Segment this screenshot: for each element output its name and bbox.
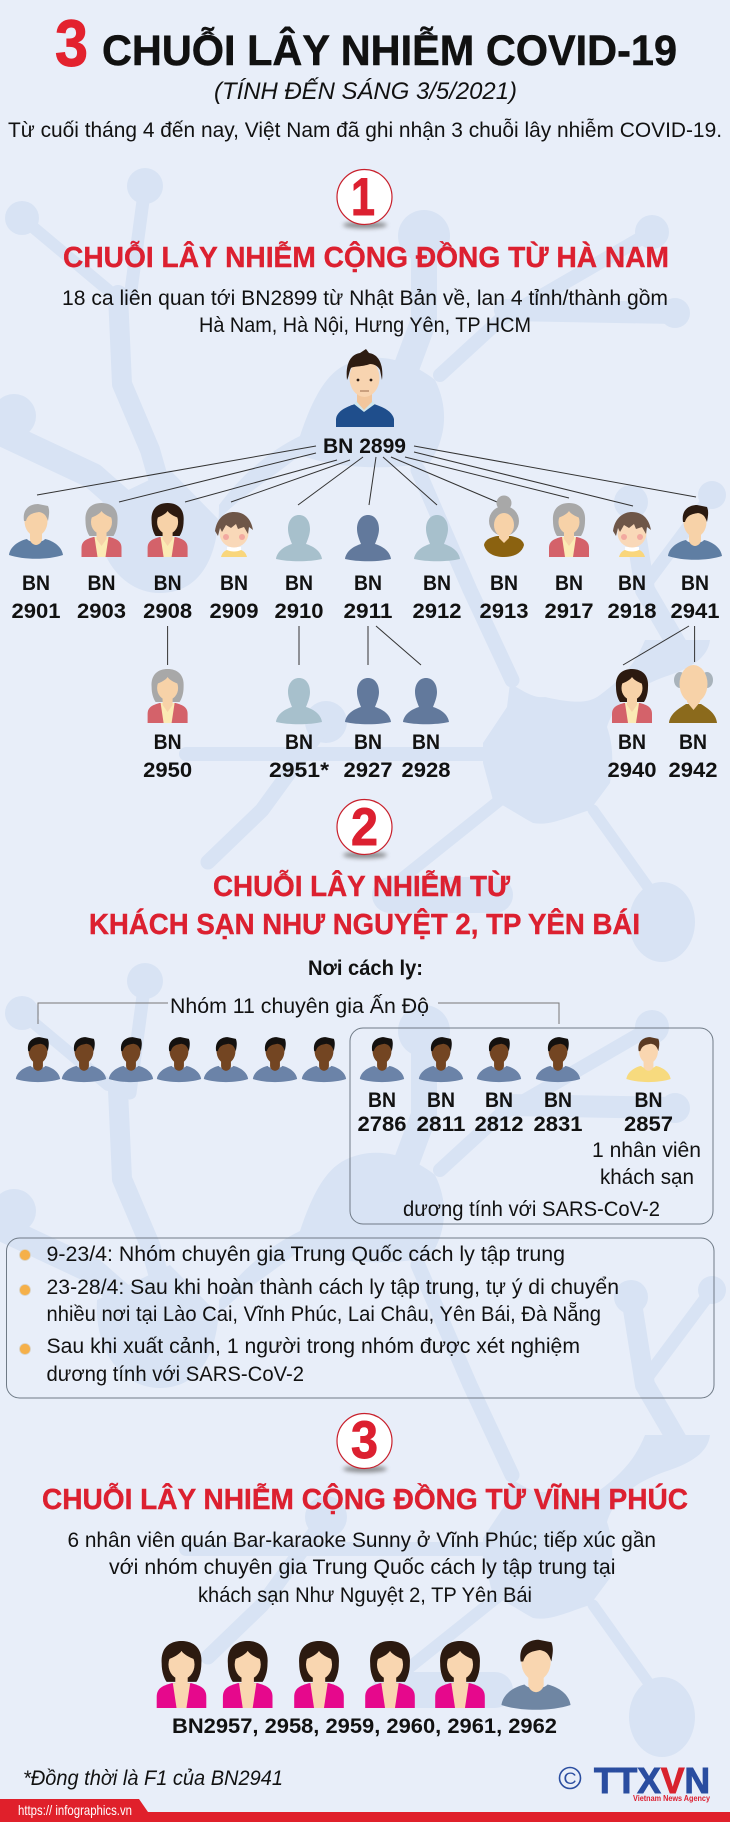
section 1 heading: CHUỖI LÂY NHIỄM CỘNG ĐỒNG TỪ HÀ NAM bbox=[63, 240, 669, 274]
patient 2910: 2910 bbox=[274, 600, 324, 623]
patient 2912: BN bbox=[423, 572, 451, 595]
patient 2917: BN bbox=[555, 572, 583, 595]
patient 2786 bbox=[358, 1037, 406, 1136]
section 3 description: với nhóm chuyên gia Trung Quốc cách ly tập trung tại bbox=[109, 1555, 616, 1579]
section 1 description: 18 ca liên quan tới BN2899 từ Nhật Bản về, lan 4 tỉnh/thành gồm bbox=[62, 286, 668, 310]
patient 2901: BN bbox=[22, 572, 50, 595]
patient 2831 bbox=[534, 1037, 583, 1136]
section 2 heading bbox=[89, 869, 640, 941]
title: CHUỖI LÂY NHIỄM COVID-19 bbox=[102, 26, 677, 75]
patient 2812: 2812 bbox=[474, 1113, 524, 1136]
subtitle date: (TÍNH ĐẾN SÁNG 3/5/2021) bbox=[214, 77, 517, 105]
bullet text: nhiều nơi tại Lào Cai, Vĩnh Phúc, Lai Châu, Yên Bái, Đà Nẵng bbox=[46, 1300, 601, 1326]
patient 2913: BN bbox=[490, 572, 518, 595]
group label with bracket bbox=[38, 993, 559, 1024]
section 1 number badge bbox=[337, 168, 392, 228]
patient 2940 bbox=[608, 669, 656, 782]
patient 2928 bbox=[402, 678, 451, 782]
patient 2857 hotel staff: 1 nhân viên bbox=[592, 1138, 701, 1162]
connector lines chain 1 bbox=[37, 446, 696, 665]
patients row 1 bbox=[9, 496, 722, 623]
section 3 description bbox=[68, 1528, 656, 1607]
patient 2910 bbox=[274, 515, 324, 623]
section 2 heading: KHÁCH SẠN NHƯ NGUYỆT 2, TP YÊN BÁI bbox=[89, 907, 640, 941]
patient 2927: BN bbox=[354, 731, 382, 754]
section 3 number badge bbox=[337, 1411, 392, 1472]
patient 2908: 2908 bbox=[143, 600, 192, 623]
patient 2941 bbox=[668, 505, 722, 623]
patient 2913 bbox=[480, 496, 528, 623]
bullet dots bbox=[20, 1250, 30, 1354]
patient 2857 hotel staff: khách sạn bbox=[600, 1165, 694, 1189]
patients row 2 bbox=[143, 665, 718, 782]
patient id list: BN2957, 2958, 2959, 2960, 2961, 2962 bbox=[172, 1715, 557, 1738]
logo: TTXVN: Vietnam News Agency bbox=[633, 1794, 710, 1803]
patient 2928: BN bbox=[412, 731, 440, 754]
patient 2857 hotel staff bbox=[592, 1037, 701, 1189]
patient 2950 bbox=[143, 669, 192, 782]
patients in box bbox=[358, 1037, 701, 1221]
logo: TTXVN: TTXVN bbox=[594, 1760, 710, 1801]
group label with bracket: Nhóm 11 chuyên gia Ấn Độ bbox=[170, 993, 429, 1018]
patient 2911: BN bbox=[354, 572, 382, 595]
section 1 number badge: 1 bbox=[351, 168, 375, 227]
patient 2901: 2901 bbox=[12, 600, 61, 623]
patient 2950: BN bbox=[154, 731, 182, 754]
patient 2811 bbox=[416, 1037, 466, 1136]
patient 2811: BN bbox=[427, 1089, 455, 1112]
patient 2940: 2940 bbox=[608, 759, 656, 782]
section 3 description: 6 nhân viên quán Bar-karaoke Sunny ở Vĩnh Phúc; tiếp xúc gần bbox=[68, 1528, 656, 1552]
patient 2811: 2811 bbox=[416, 1113, 466, 1136]
patient 2812: BN bbox=[485, 1089, 513, 1112]
patient 2857 hotel staff: 2857 bbox=[624, 1113, 673, 1136]
panel: timeline bullets bbox=[6, 1238, 714, 1398]
section 2 number badge: 2 bbox=[351, 798, 378, 857]
bullet text: dương tính với SARS-CoV-2 bbox=[46, 1362, 304, 1386]
patient 2942: 2942 bbox=[668, 759, 718, 782]
patient 2951: 2951* bbox=[269, 759, 330, 782]
title bbox=[55, 6, 677, 80]
patient 2940: BN bbox=[618, 731, 646, 754]
patient 2918 bbox=[608, 512, 657, 623]
patient 2912: 2912 bbox=[412, 600, 462, 623]
panel: confirmed cases box bbox=[350, 1028, 713, 1224]
footer bar: https:// infographics.vn bbox=[18, 1802, 132, 1818]
section 3 number badge: 3 bbox=[351, 1411, 378, 1470]
patient 2909 bbox=[210, 512, 258, 623]
patient 2831: 2831 bbox=[534, 1113, 583, 1136]
bullet text: 23-28/4: Sau khi hoàn thành cách ly tập trung, tự ý di chuyển bbox=[46, 1275, 619, 1299]
patient 2951 bbox=[269, 678, 330, 782]
intro sentence: Từ cuối tháng 4 đến nay, Việt Nam đã ghi nhận 3 chuỗi lây nhiễm COVID-19. bbox=[8, 117, 722, 142]
patient 2903 bbox=[77, 503, 126, 623]
icon: patient BN 2899 bbox=[336, 349, 394, 427]
patient 2857 hotel staff: BN bbox=[634, 1089, 662, 1112]
patient 2908: BN bbox=[154, 572, 182, 595]
section 2 number badge bbox=[337, 798, 392, 858]
six karaoke staff icons bbox=[157, 1640, 571, 1710]
patient 2918: 2918 bbox=[608, 600, 657, 623]
bullet text: Sau khi xuất cảnh, 1 người trong nhóm được xét nghiệm bbox=[46, 1334, 580, 1358]
patient 2812 bbox=[474, 1037, 524, 1136]
patient 2918: BN bbox=[618, 572, 646, 595]
patient 2913: 2913 bbox=[480, 600, 528, 623]
patient 2941: 2941 bbox=[670, 600, 720, 623]
patient 2911: 2911 bbox=[344, 600, 393, 623]
patient 2942 bbox=[668, 665, 718, 782]
patient 2928: 2928 bbox=[402, 759, 451, 782]
patient 2927: 2927 bbox=[344, 759, 392, 782]
patient 2917 bbox=[544, 503, 594, 623]
patient 2831: BN bbox=[544, 1089, 572, 1112]
footnote: *Đồng thời là F1 của BN2941 bbox=[23, 1767, 283, 1790]
patient 2909: BN bbox=[220, 572, 248, 595]
label BN 2899: BN 2899 bbox=[323, 435, 406, 458]
patient 2950: 2950 bbox=[143, 759, 192, 782]
bullet text bbox=[46, 1242, 619, 1386]
patient 2942: BN bbox=[679, 731, 707, 754]
section 3 heading: CHUỖI LÂY NHIỄM CỘNG ĐỒNG TỪ VĨNH PHÚC bbox=[42, 1482, 688, 1516]
patient 2912 bbox=[412, 515, 462, 623]
patient 2910: BN bbox=[285, 572, 313, 595]
section 1 description bbox=[62, 286, 668, 337]
patient 2927 bbox=[344, 678, 392, 782]
patient 2901 bbox=[9, 504, 63, 623]
patient 2903: 2903 bbox=[77, 600, 126, 623]
seven experts row bbox=[16, 1037, 346, 1082]
title: 3 bbox=[55, 6, 88, 80]
patient 2909: 2909 bbox=[210, 600, 258, 623]
patient 2903: BN bbox=[88, 572, 116, 595]
patient 2951: BN bbox=[285, 731, 313, 754]
patient 2941: BN bbox=[681, 572, 709, 595]
patient 2786: 2786 bbox=[358, 1113, 406, 1136]
label quarantine place: Nơi cách ly: bbox=[308, 957, 423, 980]
section 1 description: Hà Nam, Hà Nội, Hưng Yên, TP HCM bbox=[199, 313, 531, 337]
patient 2786: BN bbox=[368, 1089, 396, 1112]
section 2 heading: CHUỖI LÂY NHIỄM TỪ bbox=[213, 869, 511, 903]
bullet text: 9-23/4: Nhóm chuyên gia Trung Quốc cách ly tập trung bbox=[46, 1242, 565, 1266]
patient 2911 bbox=[344, 515, 393, 623]
section 3 description: khách sạn Như Nguyệt 2, TP Yên Bái bbox=[198, 1583, 532, 1607]
patient 2908 bbox=[143, 503, 192, 623]
logo: TTXVN: C bbox=[564, 1769, 576, 1788]
patient 2917: 2917 bbox=[544, 600, 594, 623]
footer bar bbox=[0, 1799, 730, 1822]
positive note: dương tính với SARS-CoV-2 bbox=[403, 1197, 660, 1221]
